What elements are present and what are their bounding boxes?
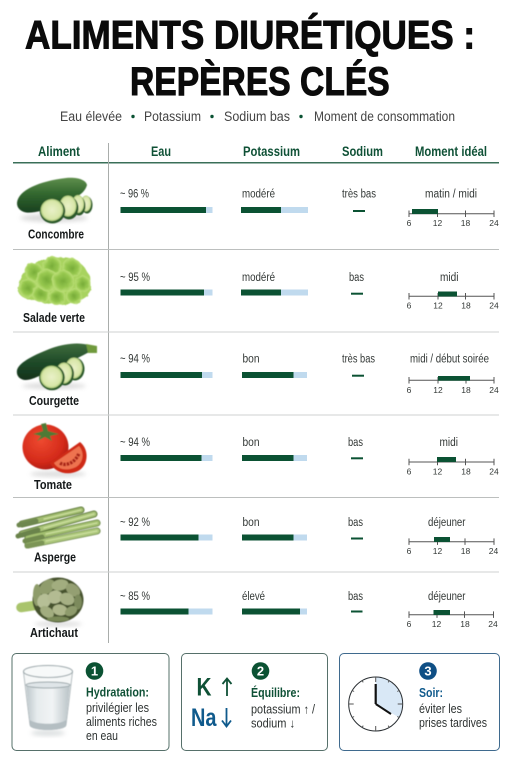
eau: 94 % — [120, 354, 212, 378]
potassium: bon: bon — [242, 437, 260, 449]
table header: Sodium — [342, 144, 383, 159]
moment: midi — [407, 437, 499, 477]
sodium: bas — [348, 591, 363, 612]
icon: horloge — [349, 677, 403, 731]
subtitle: Potassium — [144, 109, 201, 124]
moment: matin / midi: 24 — [489, 218, 499, 228]
panel: hydratation — [12, 654, 169, 750]
moment: déjeuner: déjeuner — [428, 591, 466, 603]
label: Concombre: Concombre — [28, 226, 84, 242]
potassium: bon — [242, 437, 307, 461]
eau: 94 %: ~ 94 % — [120, 354, 150, 366]
moment: midi — [407, 272, 499, 310]
sodium: bas — [348, 517, 363, 540]
icon: concombre — [17, 178, 92, 224]
moment: midi: 6 — [407, 300, 412, 310]
eau: 92 % — [120, 517, 212, 540]
icon: salade — [18, 256, 91, 306]
subtitle: Sodium bas — [224, 109, 290, 124]
text: privilégier les aliments riches en eau: privilégier les — [86, 701, 149, 715]
moment: midi: 18 — [461, 300, 471, 310]
eau: 95 % — [120, 272, 212, 296]
badge 3: 3 — [424, 664, 432, 678]
moment: matin / midi: 12 — [433, 218, 442, 228]
moment: déjeuner: 24 — [488, 619, 498, 629]
moment: déjeuner — [407, 591, 498, 629]
icon: artichaut — [21, 576, 84, 626]
moment: déjeuner: déjeuner — [428, 517, 466, 529]
table header: Aliment — [38, 144, 80, 159]
eau: 92 %: ~ 92 % — [120, 517, 150, 529]
potassium: bon: bon — [242, 517, 260, 529]
moment: midi / début soirée — [407, 354, 499, 395]
potassium: modéré — [241, 272, 308, 296]
heading: Hydratation: Hydratation: — [86, 686, 149, 700]
panel: équilibre — [182, 654, 328, 750]
text: éviter les prises tardives: prises tardives — [419, 716, 487, 730]
sodium: bas: bas — [348, 517, 363, 529]
title: REPÈRES CLÉS — [130, 59, 390, 104]
moment: midi: 24 — [489, 467, 499, 477]
potassium: bon — [242, 517, 307, 540]
eau: 85 %: ~ 85 % — [120, 591, 150, 603]
text: potassium / sodium: sodium ↓ — [251, 716, 295, 730]
moment: midi: 6 — [407, 467, 412, 477]
moment: midi: midi — [440, 437, 458, 449]
eau: 96 % — [120, 188, 212, 213]
subtitle — [60, 109, 455, 124]
moment: midi: 24 — [489, 300, 499, 310]
moment: matin / midi: matin / midi — [425, 188, 477, 200]
subtitle: Eau élevée — [60, 109, 122, 124]
moment: midi: 12 — [433, 467, 442, 477]
sodium: bas: bas — [348, 437, 363, 449]
moment: déjeuner: 12 — [433, 546, 442, 556]
subtitle: Moment de consommation — [314, 109, 455, 124]
heading: Équilibre: Équilibre: — [251, 685, 300, 700]
text: éviter les prises tardives — [419, 702, 487, 730]
potassium: bon — [242, 354, 307, 378]
eau: 95 %: ~ 95 % — [120, 272, 150, 284]
title — [25, 12, 475, 104]
label: Salade verte: Salade verte — [23, 310, 85, 325]
potassium: modéré: modéré — [242, 272, 275, 284]
moment: midi / début soirée: 18 — [461, 385, 471, 395]
text: privilégier les aliments riches en eau — [86, 701, 157, 743]
row: asperge — [18, 510, 498, 565]
icon: courgette — [17, 344, 97, 390]
moment: déjeuner: 6 — [407, 619, 412, 629]
eau: 94 %: ~ 94 % — [120, 437, 150, 449]
row: artichaut — [21, 576, 498, 640]
text: éviter les prises tardives: éviter les — [419, 702, 462, 716]
moment: midi / début soirée: 24 — [489, 385, 499, 395]
sodium: bas — [348, 437, 363, 459]
row: tomate — [22, 423, 499, 492]
sodium: très bas — [342, 354, 375, 377]
potassium: modéré: modéré — [242, 188, 275, 200]
text: potassium / sodium: potassium ↑ / — [251, 702, 315, 716]
moment: midi: 12 — [433, 300, 443, 310]
potassium: modéré — [241, 188, 308, 213]
moment: midi / début soirée: 12 — [433, 385, 443, 395]
table header: Potassium — [243, 144, 300, 159]
icon: tomate — [22, 423, 87, 477]
heading: Soir: Soir: — [419, 686, 443, 700]
icon: K up — [196, 674, 232, 702]
row: salade verte — [18, 256, 499, 325]
icon: Na down: Na — [191, 704, 217, 732]
moment: déjeuner: 18 — [461, 546, 470, 556]
panel: soir — [340, 654, 500, 750]
moment: midi: midi — [440, 272, 458, 284]
badge 3 — [419, 662, 437, 680]
moment: déjeuner — [407, 517, 498, 556]
label: Tomate: Tomate — [34, 477, 72, 492]
text: potassium / sodium — [251, 702, 315, 730]
potassium: bon: bon — [242, 354, 260, 366]
table header: Moment idéal — [415, 144, 487, 159]
moment: midi: 18 — [461, 467, 471, 477]
icon: verre d'eau — [24, 666, 72, 736]
sodium: bas: bas — [349, 272, 364, 284]
potassium: élevé — [242, 591, 307, 614]
potassium: élevé: élevé — [242, 591, 265, 603]
row: concombre — [17, 178, 499, 242]
moment: déjeuner: 24 — [489, 546, 498, 556]
eau: 85 % — [120, 591, 212, 614]
moment: midi / début soirée: 6 — [407, 385, 412, 395]
table header: Eau — [151, 144, 171, 159]
label: Artichaut: Artichaut — [30, 625, 79, 640]
icon: asperge — [18, 510, 97, 546]
row: courgette — [17, 344, 499, 408]
text: privilégier les aliments riches en eau: en eau — [86, 729, 118, 743]
moment: matin / midi: 6 — [407, 218, 412, 228]
moment: déjeuner: 18 — [460, 619, 470, 629]
text: privilégier les aliments riches en eau: aliments riches — [86, 715, 157, 729]
moment: matin / midi: 18 — [461, 218, 470, 228]
title: ALIMENTS DIURÉTIQUES : — [25, 12, 475, 57]
badge 1 — [86, 662, 103, 680]
moment: déjeuner: 6 — [407, 546, 412, 556]
sodium: très bas — [342, 188, 376, 212]
label: Asperge: Asperge — [34, 550, 76, 565]
table header — [38, 144, 487, 159]
sodium: très bas: très bas — [342, 354, 375, 366]
moment: matin / midi — [407, 188, 499, 228]
moment: déjeuner: 12 — [432, 619, 441, 629]
eau: 96 %: ~ 96 % — [120, 188, 149, 200]
badge 1: 1 — [91, 664, 98, 678]
label: Courgette: Courgette — [29, 393, 79, 408]
icon: K up: K — [196, 674, 212, 702]
badge 2 — [252, 662, 269, 680]
badge 2: 2 — [257, 664, 264, 678]
sodium: très bas: très bas — [342, 188, 376, 200]
eau: 94 % — [120, 437, 212, 461]
sodium: bas — [349, 272, 364, 295]
moment: midi / début soirée: midi / début soirée — [410, 354, 489, 366]
sodium: bas: bas — [348, 591, 363, 603]
